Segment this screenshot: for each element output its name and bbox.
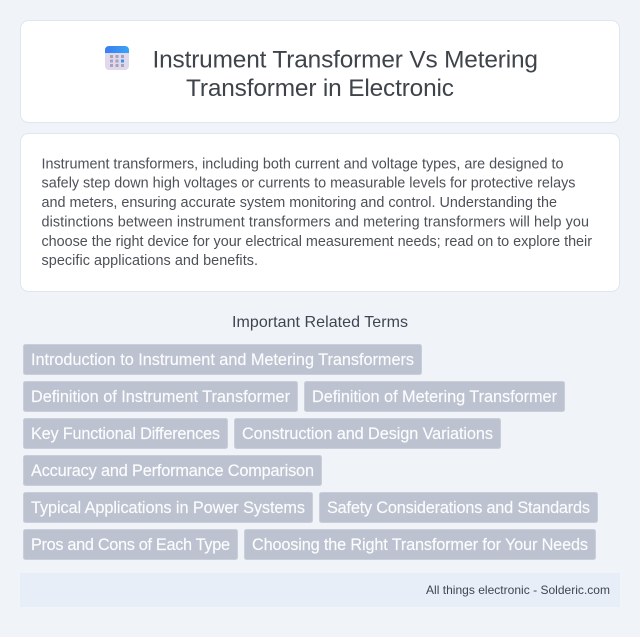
tag: pros and cons: Pros and Cons of Each Type (31, 536, 230, 554)
description text: Instrument transformers, including both current and voltage types, are designed to (42, 156, 564, 172)
description text: choose the right device for your electrical measurement needs; read on to explore their (42, 234, 592, 250)
description text: distinctions between instrument transformers and metering transformers will help you (42, 214, 589, 230)
description text: specific applications and benefits. (42, 253, 258, 269)
description text: safely step down high voltages or currents to measurable levels for protective relays (42, 176, 576, 192)
title: Transformer in Electronic (186, 75, 454, 102)
tag: safety (320, 492, 598, 522)
tag: safety: Safety Considerations and Standards (327, 499, 590, 517)
title (152, 46, 538, 102)
tag: introduction: Introduction to Instrument and Metering Transformers (31, 351, 414, 369)
footer credit: All things electronic - Solderic.com (426, 583, 610, 597)
tag: pros and cons (24, 530, 238, 560)
tag: accuracy: Accuracy and Performance Comparison (31, 462, 314, 480)
tag: construction and design (234, 418, 500, 448)
tag: introduction (24, 344, 422, 374)
tag: functional differences (24, 418, 228, 448)
tag: typical applications (24, 492, 312, 522)
tag: metering definition: Definition of Metering Transformer (312, 388, 558, 406)
footer band (20, 573, 620, 607)
title: Instrument Transformer Vs Metering (152, 46, 538, 74)
panel: title header (20, 20, 620, 122)
tag: functional differences: Key Functional Differences (31, 425, 220, 443)
tag: typical applications: Typical Applications in Power Systems (31, 499, 305, 517)
heading: important related terms: Important Related Terms (232, 314, 408, 331)
tag: choosing: Choosing the Right Transformer for Your Needs (252, 536, 588, 554)
panel: description (20, 134, 620, 292)
description text: and meters, ensuring accurate system monitoring and control. Understanding the (42, 195, 557, 211)
tag: accuracy (24, 456, 322, 486)
tag: metering definition (304, 382, 564, 412)
description text (42, 156, 592, 269)
icon: calendar grid (105, 46, 129, 70)
panel: related term tags (24, 344, 598, 560)
tag: construction and design: Construction and Design Variations (242, 425, 493, 443)
tag: instrument definition: Definition of Instrument Transformer (31, 388, 291, 406)
tag: instrument definition (24, 382, 298, 412)
tag: choosing (244, 530, 596, 560)
